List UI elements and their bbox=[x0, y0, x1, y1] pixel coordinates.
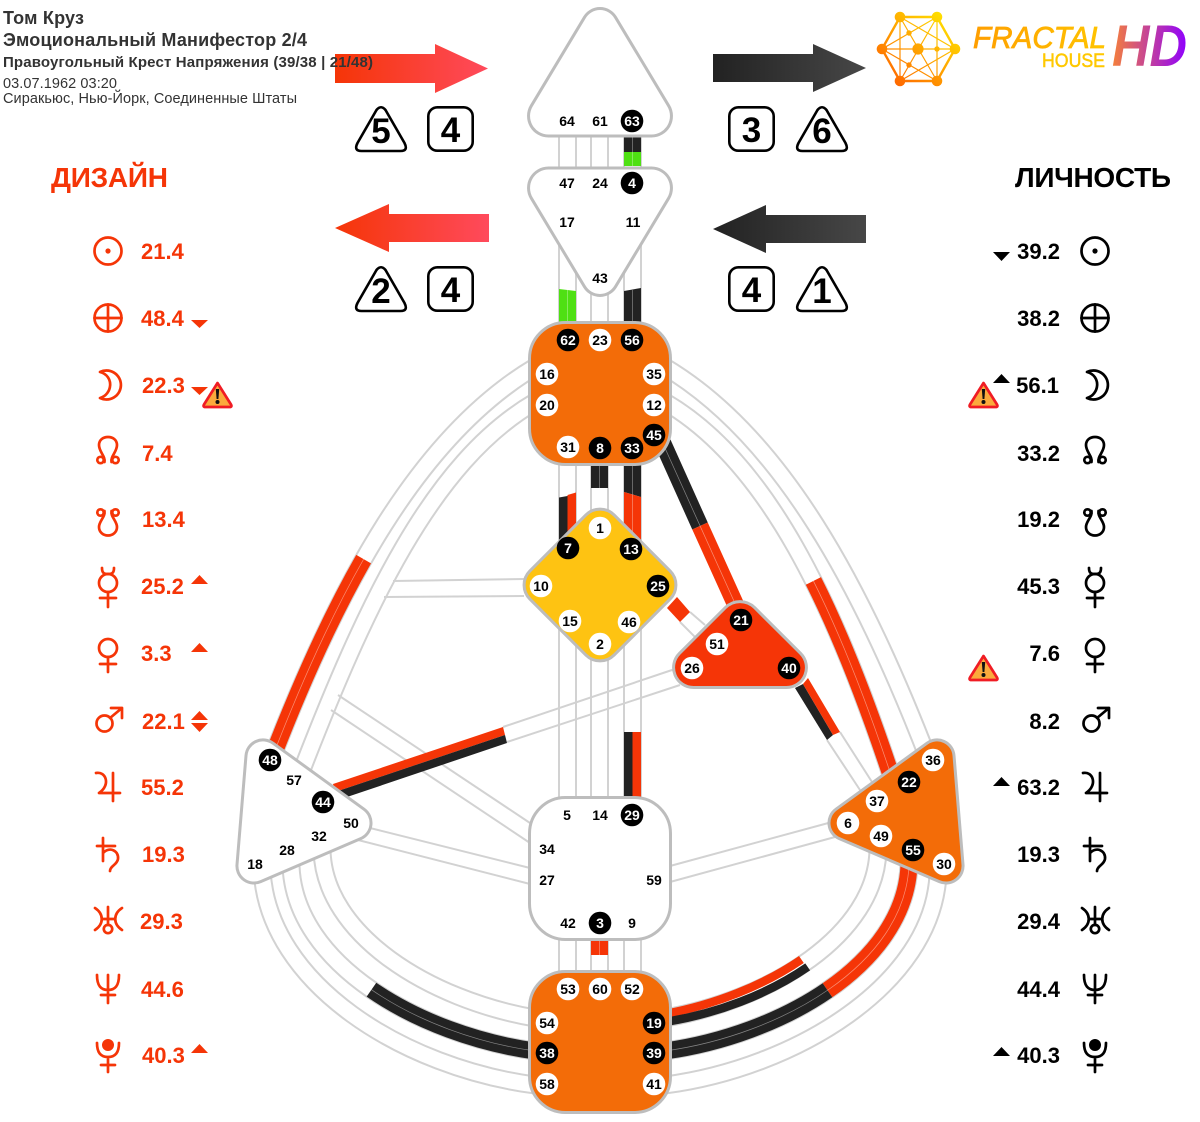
logo word hd: HD bbox=[1112, 14, 1187, 79]
spleen gates: 32 bbox=[311, 828, 327, 844]
root gates: 38 bbox=[539, 1045, 555, 1061]
type and profile: Эмоциональный Манифестор 2/4 bbox=[3, 30, 307, 50]
row: north node personality: 33.2 bbox=[1017, 441, 1060, 466]
row: venus personality bbox=[1029, 639, 1104, 672]
logo word house: HOUSE bbox=[1042, 51, 1105, 72]
straight channels base bbox=[331, 130, 872, 975]
row: neptune personality bbox=[1017, 975, 1106, 1003]
row: north node design: 7.4 bbox=[142, 441, 173, 466]
row: mercury design: 25.2 bbox=[141, 574, 184, 599]
row: earth design: 48.4 bbox=[141, 306, 185, 331]
row: jupiter personality bbox=[993, 773, 1107, 801]
row: mercury design bbox=[99, 568, 208, 607]
ajna gates: 17 bbox=[559, 214, 575, 230]
channel: 16-48 active bbox=[272, 367, 535, 758]
spleen gates: 18 bbox=[247, 856, 263, 872]
badge: square 4 bbox=[428, 107, 473, 151]
center: sacral bbox=[530, 798, 670, 940]
row: saturn design bbox=[97, 838, 185, 871]
design column bbox=[94, 238, 208, 1072]
root gates: 54 bbox=[539, 1015, 555, 1031]
throat gates: 35 bbox=[646, 366, 662, 382]
sacral gates: 14 bbox=[592, 807, 608, 823]
spleen gates: 48 bbox=[262, 752, 278, 768]
row: mercury personality: 45.3 bbox=[1017, 574, 1060, 599]
row: south node design bbox=[97, 507, 186, 536]
heading: design: ДИЗАЙН bbox=[51, 161, 168, 193]
row: neptune design: 44.6 bbox=[141, 977, 184, 1002]
channel: 31-7 active bbox=[559, 492, 576, 550]
center: solar plexus bbox=[829, 740, 963, 883]
ajna gates bbox=[559, 172, 643, 286]
sacral gates: 3 bbox=[596, 915, 604, 931]
row: jupiter personality: 63.2 bbox=[1017, 775, 1060, 800]
ajna gates: 24 bbox=[592, 175, 608, 191]
badge: triangle 6: 6 bbox=[812, 112, 832, 151]
badge: triangle 2: 2 bbox=[371, 272, 391, 311]
spleen gates: 50 bbox=[343, 815, 359, 831]
row: moon personality: 56.1 bbox=[1016, 373, 1059, 398]
channel: 11-56 active bbox=[624, 288, 641, 325]
heart gates: 40 bbox=[781, 660, 797, 676]
birth date: 03.07.1962 03:20 bbox=[3, 76, 117, 92]
sacral gates: 5 bbox=[563, 807, 571, 823]
badge: square 3: 3 bbox=[742, 111, 761, 150]
ajna gates: 47 bbox=[559, 175, 575, 191]
birth place: Сиракьюс, Нью-Йорк, Соединенные Штаты bbox=[3, 89, 297, 107]
solar plexus gates bbox=[837, 749, 955, 875]
throat gates: 31 bbox=[560, 439, 576, 455]
channel: 40-37 active bbox=[795, 678, 840, 740]
row: south node personality: 19.2 bbox=[1017, 507, 1060, 532]
row: venus personality: 7.6 bbox=[1029, 641, 1060, 666]
center: heart bbox=[674, 602, 806, 688]
header: person info bbox=[3, 8, 373, 107]
head gates: 61 bbox=[592, 113, 608, 129]
row: uranus personality: 29.4 bbox=[1017, 909, 1061, 934]
badge: square 4 lower bbox=[428, 267, 473, 311]
bodygraph channels bbox=[262, 130, 938, 1085]
spleen gates bbox=[247, 749, 359, 872]
row: moon personality bbox=[993, 371, 1108, 399]
throat gates: 56 bbox=[624, 332, 640, 348]
heart gates: 51 bbox=[709, 636, 725, 652]
row: uranus design: 29.3 bbox=[140, 909, 183, 934]
row: sun design: 21.4 bbox=[141, 239, 185, 264]
warning: moon personality bbox=[970, 383, 997, 407]
row: pluto design bbox=[97, 1039, 208, 1072]
badge: triangle 5: 5 bbox=[371, 112, 391, 151]
logo: fractal house hd bbox=[877, 12, 1187, 86]
channel: 25-51 active bbox=[667, 597, 690, 622]
row: south node personality bbox=[1017, 507, 1106, 536]
arrow: design top bbox=[335, 44, 488, 93]
badge: square 4: 4 bbox=[441, 111, 461, 150]
row: pluto design: 40.3 bbox=[142, 1043, 185, 1068]
ajna gates: 43 bbox=[592, 270, 608, 286]
root gates: 53 bbox=[560, 981, 576, 997]
ajna gates: 11 bbox=[626, 214, 641, 230]
row: uranus personality bbox=[1017, 907, 1109, 934]
row: pluto personality: 40.3 bbox=[1017, 1043, 1060, 1068]
channel: 8-1 active bbox=[591, 462, 608, 488]
row: sun personality: 39.2 bbox=[1017, 239, 1060, 264]
channel: 17-62 active bbox=[559, 289, 576, 325]
arrow: personality bottom bbox=[713, 205, 866, 253]
root gates: 41 bbox=[646, 1076, 662, 1092]
heart gates: 26 bbox=[684, 660, 700, 676]
row: venus design: 3.3 bbox=[141, 641, 172, 666]
spleen gates: 44 bbox=[315, 794, 331, 810]
row: earth design bbox=[94, 304, 208, 332]
g gates: 25 bbox=[650, 578, 666, 594]
logo icon bbox=[877, 12, 960, 86]
throat gates: 20 bbox=[539, 397, 555, 413]
channel: 63-4 active bbox=[624, 137, 641, 166]
head gates: 64 bbox=[559, 113, 575, 129]
root gates bbox=[536, 978, 665, 1095]
sacral gates: 42 bbox=[560, 915, 576, 931]
incarnation cross: Правоугольный Крест Напряжения (39/38 | 21/48) bbox=[3, 54, 373, 71]
row: pluto personality bbox=[993, 1039, 1106, 1072]
row: earth personality bbox=[1017, 304, 1108, 332]
center: ajna bbox=[529, 168, 671, 295]
row: south node design: 13.4 bbox=[142, 507, 186, 532]
sacral gates: 9 bbox=[628, 915, 636, 931]
badge: triangle 1 bbox=[797, 267, 847, 311]
g gates: 15 bbox=[562, 613, 578, 629]
ajna gates: 4 bbox=[628, 175, 636, 191]
head gates bbox=[559, 110, 643, 132]
throat gates: 45 bbox=[646, 427, 662, 443]
solar plexus gates: 37 bbox=[869, 793, 885, 809]
throat gates bbox=[536, 329, 665, 459]
center: head bbox=[529, 9, 671, 136]
badge: triangle 2 bbox=[356, 267, 406, 311]
channel: 44-26 active bbox=[333, 727, 507, 797]
sacral gates bbox=[539, 804, 662, 934]
badge: triangle 6 bbox=[797, 107, 847, 151]
row: sun personality bbox=[993, 238, 1108, 264]
badge: square 4 right: 4 bbox=[742, 271, 762, 310]
root gates: 39 bbox=[646, 1045, 662, 1061]
spleen gates: 28 bbox=[279, 842, 295, 858]
row: mars personality bbox=[1029, 708, 1109, 734]
badge: triangle 1: 1 bbox=[812, 272, 832, 311]
row: uranus design bbox=[95, 907, 183, 934]
channel: 3-60 active bbox=[591, 938, 608, 955]
solar plexus gates: 22 bbox=[901, 774, 917, 790]
row: jupiter design: 55.2 bbox=[141, 775, 184, 800]
spleen gates: 57 bbox=[286, 772, 302, 788]
channel: 29-46 active bbox=[624, 732, 641, 800]
center: g identity bbox=[524, 509, 676, 661]
center: throat bbox=[530, 322, 670, 464]
row: north node design bbox=[97, 437, 173, 466]
throat gates: 12 bbox=[646, 397, 662, 413]
row: moon design: 22.3 bbox=[142, 373, 185, 398]
arrow: design bottom bbox=[335, 204, 489, 252]
row: earth personality: 38.2 bbox=[1017, 306, 1060, 331]
row: saturn design: 19.3 bbox=[142, 842, 185, 867]
badge: square 3 bbox=[729, 107, 774, 151]
center: root bbox=[530, 972, 670, 1112]
badge: triangle 5 bbox=[356, 107, 406, 151]
badge: square 4 right bbox=[729, 267, 774, 311]
row: jupiter design bbox=[96, 773, 184, 801]
warning: venus personality bbox=[970, 656, 997, 680]
warning: moon design bbox=[204, 383, 231, 407]
root gates: 60 bbox=[592, 981, 608, 997]
row: moon design bbox=[100, 371, 208, 399]
solar plexus gates: 49 bbox=[873, 828, 889, 844]
arrow: personality top bbox=[713, 44, 866, 92]
name: Том Круз bbox=[3, 8, 84, 28]
solar plexus gates: 30 bbox=[936, 856, 952, 872]
row: sun design bbox=[94, 238, 185, 264]
curved channels base bbox=[262, 367, 938, 1085]
row: mars design: 22.1 bbox=[142, 709, 185, 734]
root gates: 19 bbox=[646, 1015, 662, 1031]
throat gates: 33 bbox=[624, 440, 640, 456]
sacral gates: 27 bbox=[539, 872, 555, 888]
channel: 19-49 active bbox=[665, 850, 882, 1022]
heading: personality: ЛИЧНОСТЬ bbox=[1015, 162, 1171, 193]
sacral gates: 59 bbox=[646, 872, 662, 888]
row: neptune design bbox=[97, 975, 184, 1003]
solar plexus gates: 55 bbox=[905, 842, 921, 858]
head gates: 63 bbox=[624, 113, 640, 129]
row: venus design bbox=[99, 639, 208, 672]
g gates: 46 bbox=[621, 614, 637, 630]
root gates: 52 bbox=[624, 981, 640, 997]
sacral gates: 34 bbox=[539, 841, 555, 857]
g gates: 2 bbox=[596, 636, 604, 652]
row: mars design bbox=[96, 708, 208, 734]
channel: 33-13 active bbox=[624, 462, 641, 560]
root gates: 58 bbox=[539, 1076, 555, 1092]
g gates bbox=[530, 517, 669, 655]
g gates: 1 bbox=[596, 520, 604, 536]
throat gates: 8 bbox=[596, 440, 604, 456]
row: mercury personality bbox=[1017, 568, 1104, 607]
row: neptune personality: 44.4 bbox=[1017, 977, 1061, 1002]
channel: 28-38 active bbox=[291, 866, 535, 1051]
g gates: 13 bbox=[623, 541, 639, 557]
throat gates: 23 bbox=[592, 332, 608, 348]
heart gates: 21 bbox=[733, 612, 749, 628]
g gates: 10 bbox=[533, 578, 549, 594]
row: saturn personality bbox=[1017, 838, 1105, 871]
g gates: 7 bbox=[564, 540, 572, 556]
channel: 39-55 active bbox=[665, 865, 909, 1051]
solar plexus gates: 36 bbox=[925, 752, 941, 768]
channel: 45-21 active bbox=[660, 437, 738, 610]
channel: 12-22 active bbox=[665, 402, 891, 775]
row: mars personality: 8.2 bbox=[1029, 709, 1060, 734]
logo word fractal: FRACTAL bbox=[973, 20, 1106, 55]
personality column bbox=[993, 238, 1109, 1072]
row: north node personality bbox=[1017, 437, 1106, 466]
heart gates bbox=[681, 609, 800, 679]
badge: square 4 lower: 4 bbox=[441, 271, 461, 310]
center: spleen bbox=[237, 740, 371, 883]
row: saturn personality: 19.3 bbox=[1017, 842, 1060, 867]
throat gates: 62 bbox=[560, 332, 576, 348]
sacral gates: 29 bbox=[624, 807, 640, 823]
throat gates: 16 bbox=[539, 366, 555, 382]
solar plexus gates: 6 bbox=[844, 815, 852, 831]
